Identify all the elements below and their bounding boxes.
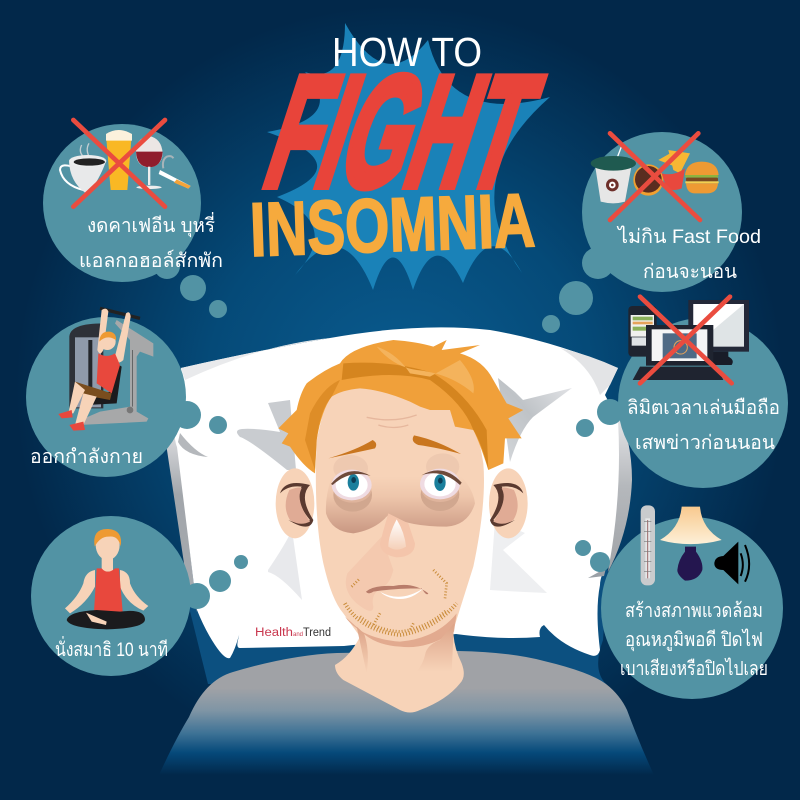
text: line 2: อุณหภูมิพอดี ปิดไฟ [625,628,763,652]
text: line 2: ก่อนจะนอน [643,261,737,283]
text: line 1: ไม่กิน Fast Food [616,225,761,248]
logo: and [293,632,303,638]
text: line 2: แอลกอฮอล์สักพัก [79,249,223,272]
logo: Trend [303,627,331,639]
neck shadows [345,613,457,673]
eyebrows [328,435,461,458]
bed and pillow [167,327,632,684]
text: นั่งสมาธิ 10 นาที [55,636,168,661]
panel: bedroom environment [575,505,783,699]
text: line 1: งดคาเฟอีน บุหรี่ [87,212,215,238]
sleepless man [276,340,528,712]
logo: Health [255,627,293,639]
logo [255,627,331,639]
text: ออกกำลังกาย [30,446,143,468]
icon: fast food [591,133,719,220]
hair [278,340,523,473]
title: insomnia: INSOMNIA [249,178,536,273]
panel: no caffeine, cigarettes, alcohol [43,120,227,318]
eyes [331,453,462,512]
title: how to: HOW TO [332,29,482,75]
text: line 1: สร้างสภาพแวดล้อม [625,600,763,622]
title burst [267,23,550,290]
icon: coffee, beer, wine, cigarette [60,120,191,207]
text: line 3: เบาเสียงหรือปิดไปเลย [620,657,768,680]
ears [276,468,528,538]
title: fight: FIGHT [248,43,557,220]
panel: no fast food [542,132,761,333]
panel: exercise [26,308,227,477]
text: line 1: ลิมิตเวลาเล่นมือถือ [627,397,780,419]
panel: limit devices [576,297,788,488]
icon: thermometer, lamp, speaker [641,505,749,585]
forehead lines [367,415,417,427]
nose [380,513,415,557]
panel: meditation [31,516,248,676]
text: line 2: เสพข่าวก่อนนอน [635,432,775,454]
icon: meditating person [65,529,148,629]
cheek shading [346,537,393,611]
stubble [345,570,457,635]
shirt [159,651,654,775]
icon: gym machine [58,308,153,431]
mouth [366,585,428,599]
icon: phone, laptop, monitor [628,297,749,383]
face and neck [316,373,484,712]
under-eye bags [326,477,475,533]
